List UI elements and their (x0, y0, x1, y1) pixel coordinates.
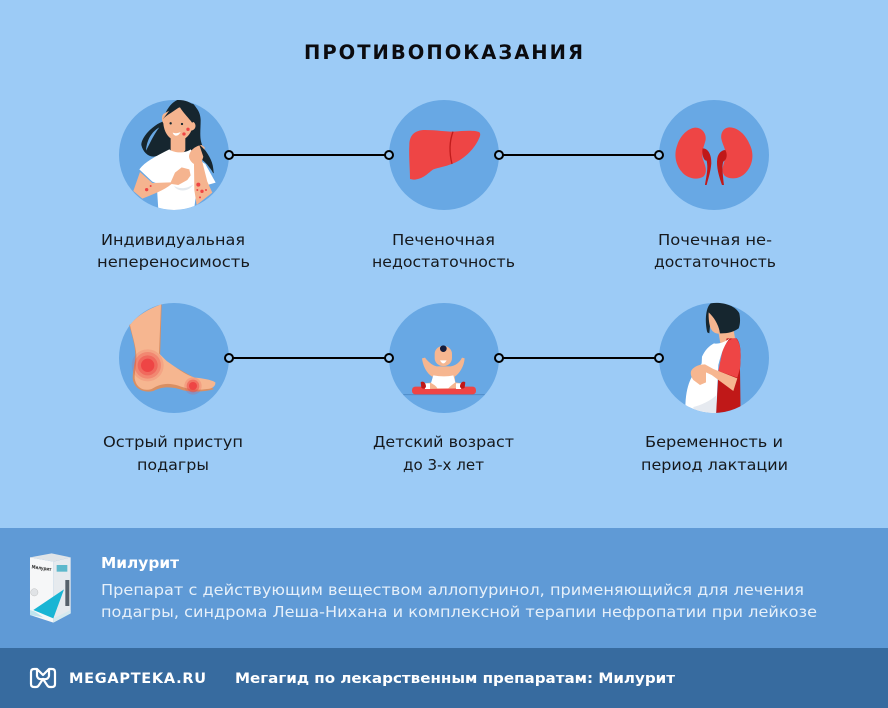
connector: row 2 left (225, 354, 393, 362)
label: непереносимость (97, 253, 250, 271)
label (654, 231, 776, 271)
icon: woman with rash (133, 100, 216, 211)
label: Детский возраст (373, 433, 514, 451)
drug description: подагры, синдрома Леша-Нихана и комплексной терапии нефропатии при лейкозе (101, 603, 817, 621)
title: ПРОТИВОПОКАЗАНИЯ (304, 41, 583, 64)
label: Индивидуальная (101, 231, 245, 249)
icon: medicine box (30, 553, 71, 623)
drug name: Милурит (101, 554, 179, 572)
logo text: MEGAPTEKA.RU (69, 671, 206, 687)
footer caption: Мегагид по лекарственным препаратам: Милурит (235, 671, 676, 687)
label: достаточность (654, 253, 776, 271)
drug description (101, 581, 817, 621)
drug description: Препарат с действующим веществом аллопуринол, применяющийся для лечения (101, 581, 804, 599)
icon: medicine box: Милурит (31, 564, 52, 573)
label (372, 231, 515, 271)
connector: row 1 left (225, 151, 393, 159)
icon: kidneys (675, 127, 752, 185)
connector: row 2 right (495, 354, 663, 362)
label: Почечная не- (658, 231, 772, 249)
label (103, 433, 243, 474)
label (641, 433, 788, 474)
footer bar (0, 648, 888, 708)
item: kidney failure (654, 100, 776, 271)
label: Беременность и (645, 433, 783, 451)
label: Острый приступ (103, 433, 243, 451)
item: pregnancy and lactation (641, 303, 788, 474)
logo icon (31, 669, 55, 687)
icon: foot with inflamed joints (129, 304, 215, 395)
label: недостаточность (372, 253, 515, 271)
label: период лактации (641, 456, 788, 474)
label (373, 433, 514, 474)
icon: pregnant woman (685, 303, 741, 415)
label: Печеночная (392, 231, 495, 249)
icon: liver (409, 130, 480, 180)
item: gout attack (103, 303, 243, 474)
connector: row 1 right (495, 151, 663, 159)
label (97, 231, 250, 271)
label: подагры (137, 456, 209, 474)
icon: baby on red mat (403, 345, 485, 395)
item: intolerance (97, 100, 250, 271)
item: liver failure (372, 100, 515, 271)
panel: drug info (0, 528, 888, 648)
item: children under 3 (373, 303, 514, 474)
label: до 3-х лет (403, 456, 484, 474)
